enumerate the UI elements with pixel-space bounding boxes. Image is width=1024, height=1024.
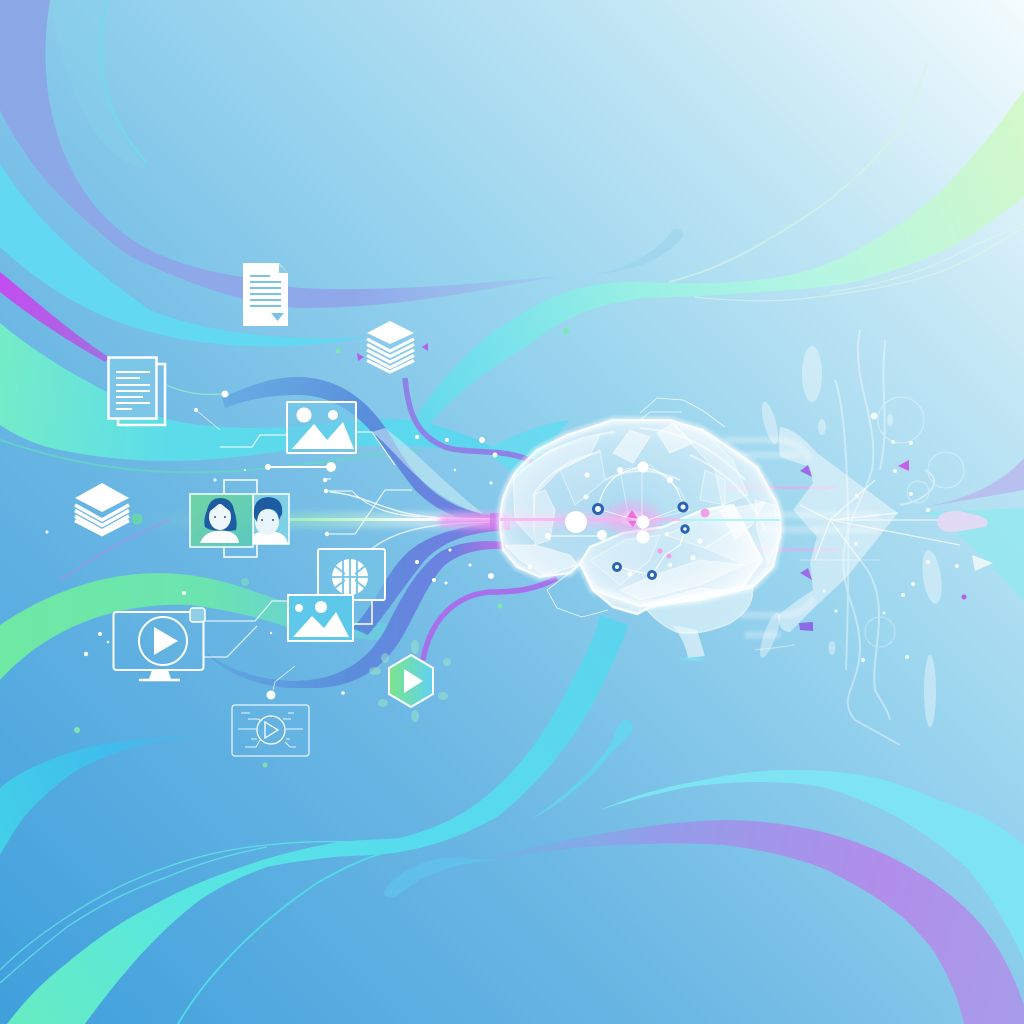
ribbon: thin green line <box>0 440 420 472</box>
icon: connector with nodes <box>265 462 336 472</box>
ribbon: upper blue arc <box>222 377 510 525</box>
ribbon: right cyan <box>925 508 1024 602</box>
white arrowhead <box>972 555 993 571</box>
brain <box>500 398 781 662</box>
ribbon: lower-left green <box>0 573 400 680</box>
brain facets <box>505 423 778 576</box>
brain temporal lobe <box>580 505 762 614</box>
brain cerebellum <box>647 585 753 633</box>
icon: video monitor <box>114 608 205 680</box>
icon: data stack left <box>75 483 142 534</box>
ribbon: top-left thin cyan <box>101 0 147 163</box>
ribbon: curved hook <box>384 858 500 897</box>
right side dissolving particles <box>725 330 993 745</box>
brain stem glow <box>677 656 709 662</box>
central magenta glow <box>598 496 666 540</box>
icon: connector lines <box>166 385 420 690</box>
icon: hexagon play <box>369 640 451 722</box>
ribbon: faint teardrop top <box>595 229 683 274</box>
neural blue rings <box>594 503 688 578</box>
ribbon: middle blue arc <box>352 522 510 635</box>
ribbon: pale streak to centre <box>372 428 485 515</box>
ribbon: fine lines right <box>695 224 1024 301</box>
neural pink nodes <box>658 508 710 558</box>
icon: double document left <box>108 358 165 425</box>
pink beam across brain <box>500 518 680 521</box>
icon: two faces <box>190 480 289 557</box>
ribbon: lower blue arc <box>203 541 505 688</box>
neural white nodes <box>528 462 702 576</box>
ribbon: bottom-right pale cyan <box>600 770 1024 960</box>
ribbon: purple from stack <box>405 378 533 462</box>
temporal lobe facets <box>590 508 760 605</box>
icon: data stack top right <box>357 321 428 372</box>
magenta markers <box>799 460 966 631</box>
kite facets <box>800 480 960 560</box>
icon: image card upper <box>287 402 356 453</box>
ribbon: left green to cyan <box>0 323 510 461</box>
ribbon: top-left purple <box>0 0 560 308</box>
ribbon: large lower cyan sweep <box>7 615 628 1024</box>
ribbon: thin cyan line to bottom <box>178 853 383 1024</box>
flowing lines <box>755 330 964 745</box>
brain cerebrum outline <box>500 420 781 606</box>
ribbon: faint purple diagonal <box>60 520 170 580</box>
left portrait card <box>190 494 274 547</box>
right channels behind brain <box>725 440 880 635</box>
central pink spark <box>626 510 638 527</box>
ribbon: right purple <box>920 458 1024 508</box>
brain stem <box>672 625 705 658</box>
central light beam <box>130 492 660 550</box>
pink streaks <box>725 486 840 551</box>
green particles <box>74 328 569 733</box>
ribbon: magenta stripe <box>0 272 110 362</box>
ribbon: purple from hexagon <box>423 578 557 660</box>
ribbon: bottom-right purple <box>480 820 1024 1024</box>
ribbon: faint band right of purple <box>50 0 150 170</box>
brain gyri lines <box>520 428 765 530</box>
cyan beam across brain <box>680 519 780 521</box>
white particles <box>822 412 959 662</box>
icon: image card lower <box>288 595 372 641</box>
ribbon: teardrop swoosh <box>530 720 633 820</box>
icon: document top <box>243 263 288 326</box>
neural network lines <box>547 398 725 617</box>
brain soft outer rim <box>500 420 781 606</box>
ribbon: right green to cyan <box>410 90 1024 440</box>
pale blobs <box>756 346 945 727</box>
pale pill <box>937 511 988 532</box>
ribbon: twin fine lines lower-left <box>0 842 350 983</box>
right portrait card <box>247 494 289 544</box>
kite shape <box>778 427 898 632</box>
icon: video diagram card <box>232 690 309 768</box>
scattered particles <box>46 390 498 695</box>
ribbon: top-left cyan <box>0 163 367 346</box>
ribbon: cyan swoosh behind brain <box>480 420 570 480</box>
ribbon: lower-left cyan band <box>0 733 230 855</box>
icon: chart card <box>318 549 385 600</box>
ribbon: faint thin line to upper right <box>669 63 927 282</box>
